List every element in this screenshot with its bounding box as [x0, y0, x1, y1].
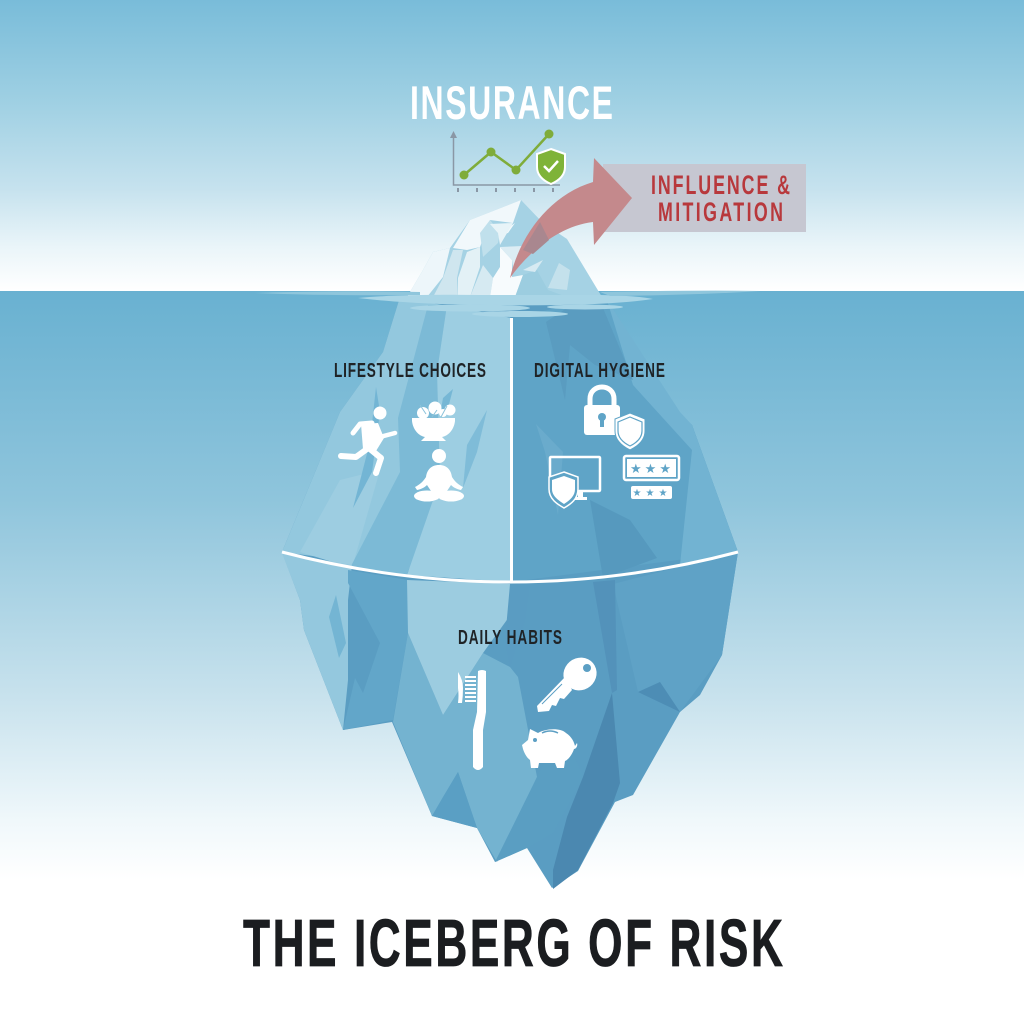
icon: password fields: ★★★ — [630, 462, 674, 477]
callout: influence and mitigation banner: INFLUENCE & — [651, 169, 790, 200]
icon: monitor with shield — [549, 457, 600, 508]
icon: password fields: ★★★ — [633, 488, 671, 499]
background: sea — [0, 291, 1024, 1024]
chart: insurance line graph with shield — [450, 130, 565, 192]
heading: Insurance: INSURANCE — [410, 77, 613, 130]
label: daily habits: DAILY HABITS — [458, 626, 562, 649]
icon: meditation figure — [414, 449, 464, 502]
title: THE ICEBERG OF RISK — [243, 907, 783, 981]
icon: runner — [341, 406, 395, 473]
icon: password fields — [624, 456, 679, 499]
callout: influence and mitigation banner — [603, 164, 806, 232]
lower facets — [282, 553, 352, 730]
callout: influence and mitigation banner: MITIGATION — [658, 196, 783, 227]
icon: key — [537, 651, 603, 712]
upper right facets — [511, 297, 738, 582]
label: digital hygiene: DIGITAL HYGIENE — [534, 359, 665, 382]
icon: piggy bank — [522, 729, 577, 768]
waterline reflection — [255, 291, 760, 317]
dividers between iceberg sections — [282, 318, 738, 583]
label: lifestyle choices: LIFESTYLE CHOICES — [334, 359, 486, 382]
icon: salad bowl — [412, 402, 456, 441]
icon: toothbrush — [458, 670, 486, 770]
arrow: influence arrow over the tip — [510, 158, 632, 278]
iceberg: tip above water — [407, 200, 602, 297]
iceberg: submerged body — [282, 297, 738, 889]
upper left facets — [282, 297, 511, 582]
icon: green check shield — [537, 149, 565, 184]
icon: padlock with shield — [584, 387, 645, 450]
background: sky — [0, 0, 1024, 291]
